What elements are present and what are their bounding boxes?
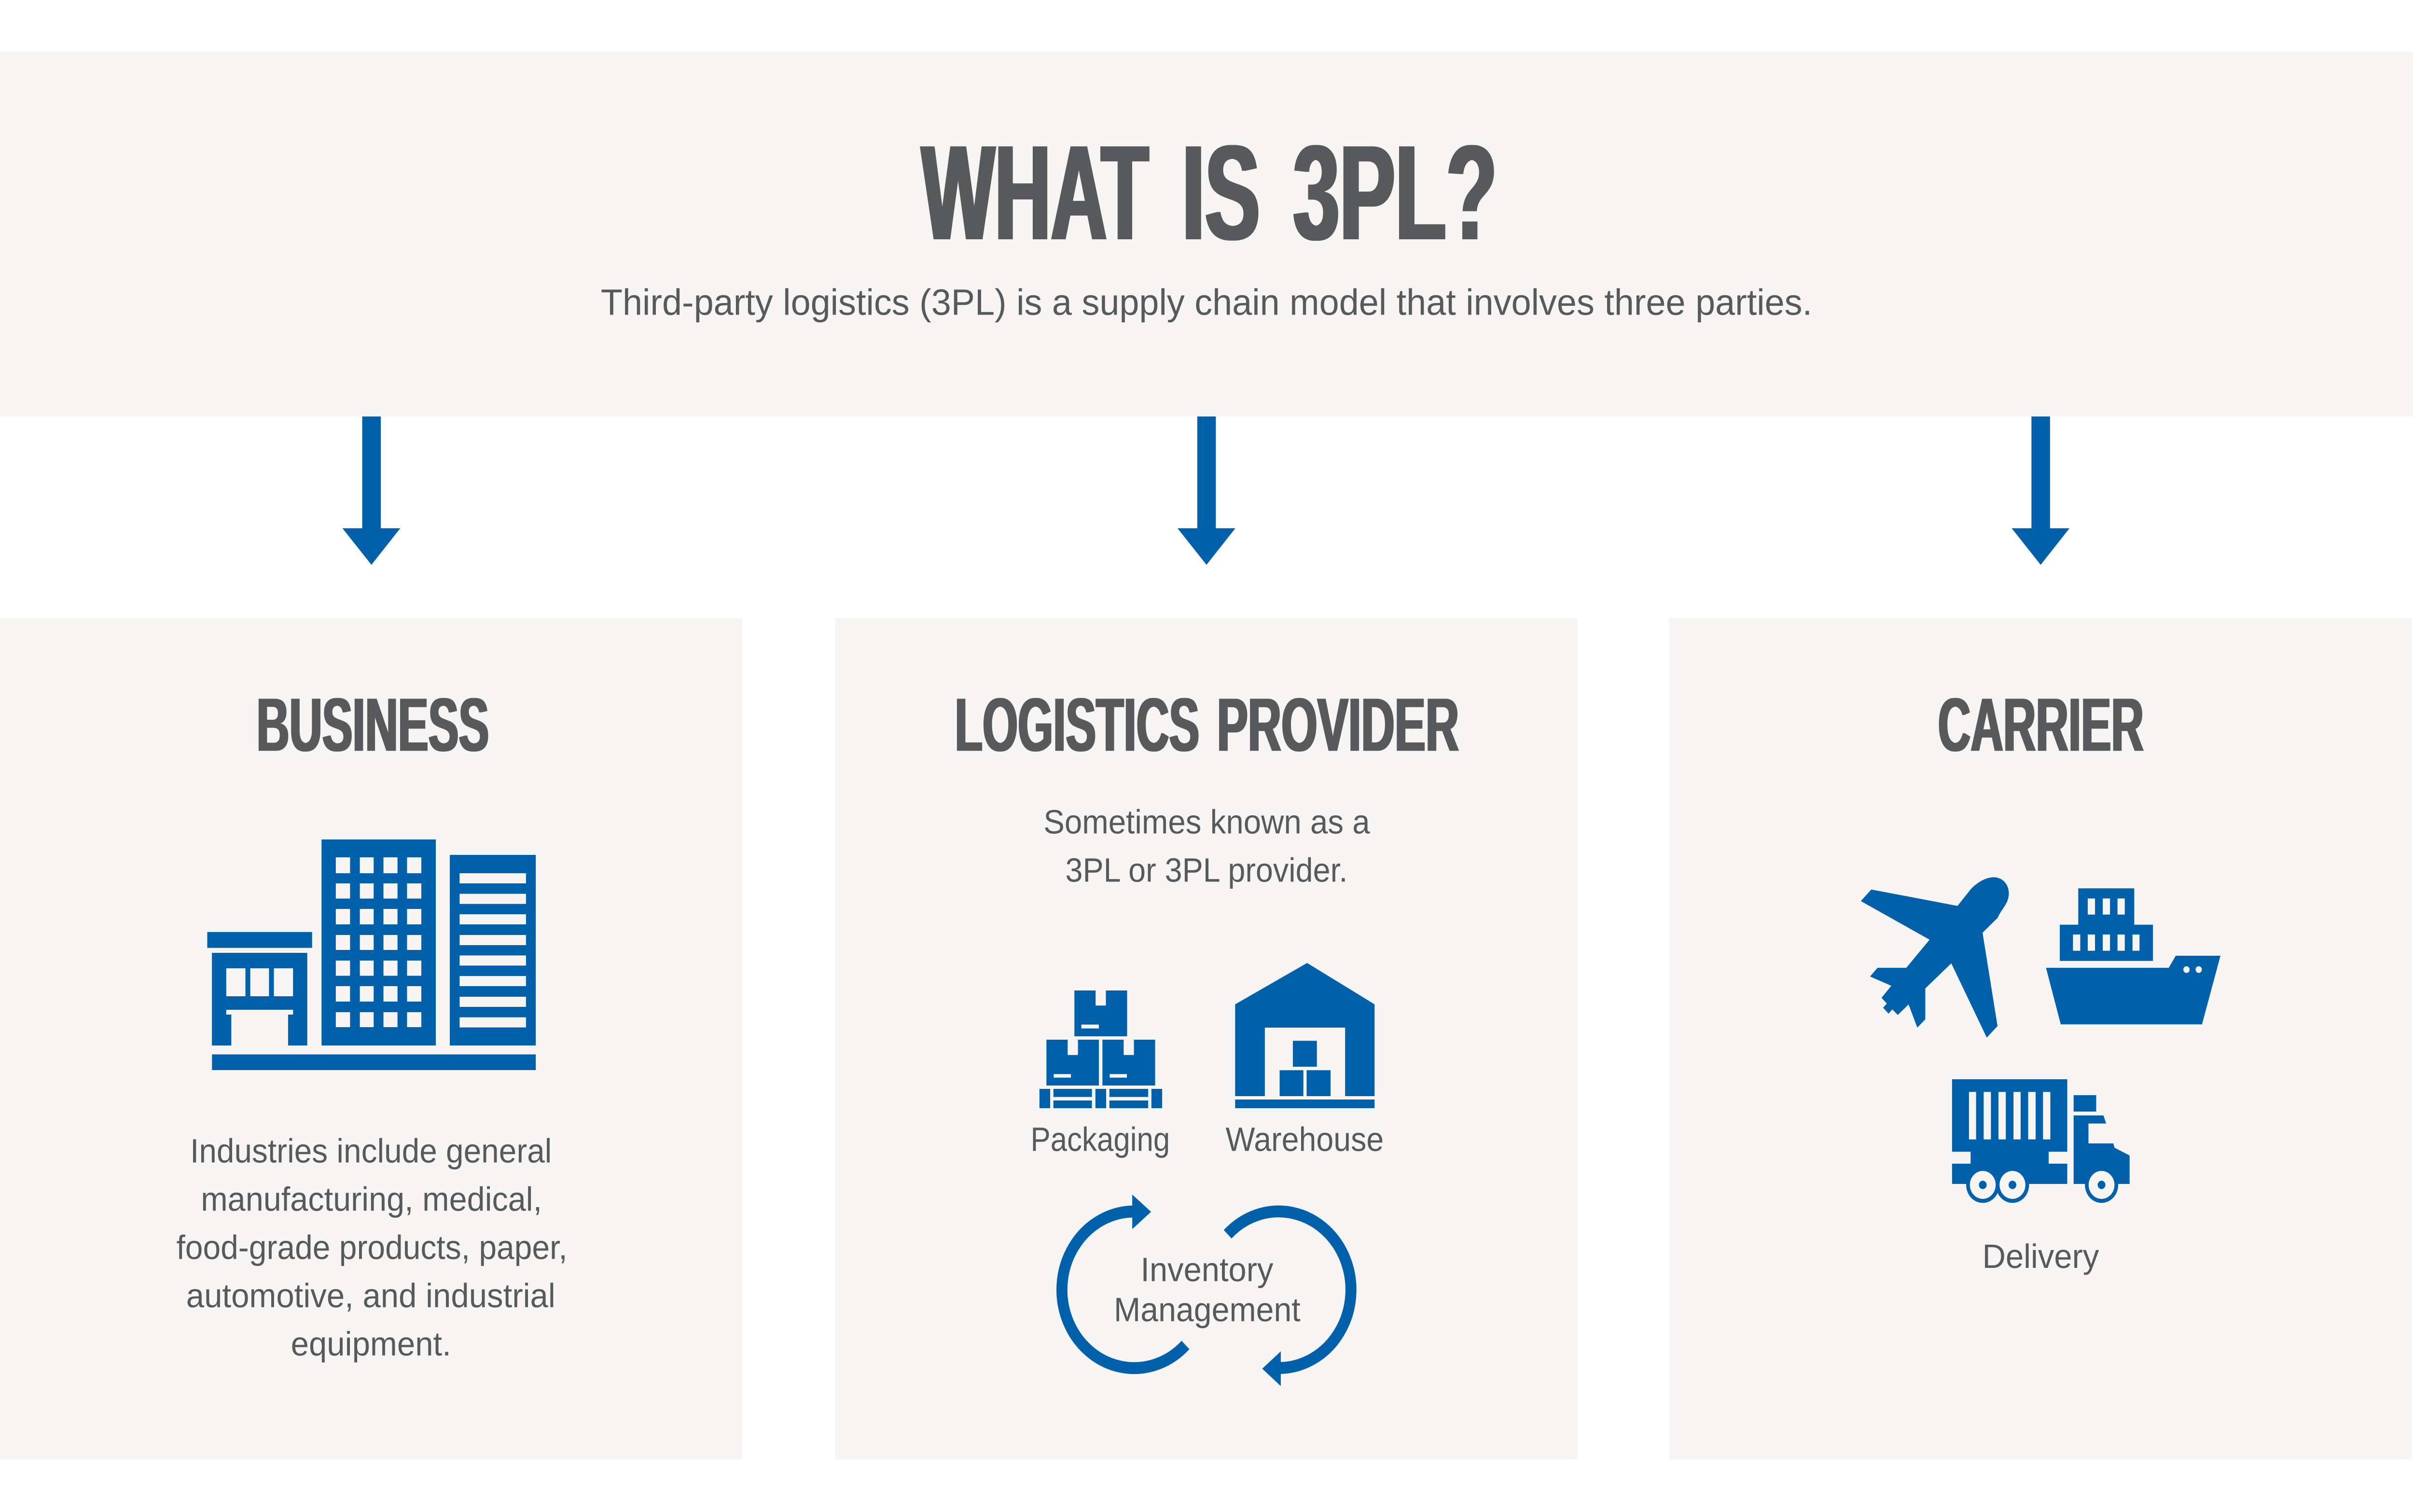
logistics heading: LOGISTICS xyxy=(955,683,1199,767)
subtitle: Third-party logistics (3PL) is a supply chain model that involves three parties. xyxy=(601,282,1812,323)
carrier panel background xyxy=(1669,618,2412,1459)
arrow: to carrier xyxy=(2012,416,2069,565)
business heading: BUSINESS xyxy=(257,683,489,767)
icon: packaging boxes xyxy=(1040,990,1162,1108)
title xyxy=(921,118,1497,268)
arrow: to logistics provider xyxy=(1178,416,1235,565)
business description: automotive, and industrial xyxy=(186,1277,555,1314)
title: IS xyxy=(1182,118,1260,268)
logistics description xyxy=(1043,803,1370,889)
panel: business xyxy=(0,618,742,1459)
inventory management label xyxy=(1114,1251,1301,1329)
business description: equipment. xyxy=(291,1325,451,1362)
panel: logistics provider xyxy=(835,618,1577,1459)
business description: Industries include general xyxy=(190,1132,552,1169)
icon: warehouse xyxy=(1235,963,1374,1108)
title: 3PL? xyxy=(1293,118,1497,268)
inventory management label: Inventory xyxy=(1140,1251,1273,1288)
icon: inventory cycle arrows xyxy=(1062,1195,1351,1386)
icon: cargo ship xyxy=(2046,888,2220,1024)
delivery label: Delivery xyxy=(1983,1237,2099,1275)
business description: manufacturing, medical, xyxy=(201,1180,542,1218)
packaging label: Packaging xyxy=(1030,1121,1170,1158)
inventory management label: Management xyxy=(1114,1291,1301,1329)
business description: food-grade products, paper, xyxy=(176,1228,568,1266)
warehouse label: Warehouse xyxy=(1226,1121,1384,1158)
business panel background xyxy=(0,618,742,1459)
business description xyxy=(176,1132,568,1362)
logistics heading: PROVIDER xyxy=(1217,683,1459,767)
panel: carrier xyxy=(1669,618,2412,1459)
carrier heading: CARRIER xyxy=(1938,683,2144,767)
icon: airplane xyxy=(1861,877,2009,1038)
title: WHAT xyxy=(921,118,1149,268)
logistics description: Sometimes known as a xyxy=(1043,803,1370,841)
header background xyxy=(0,52,2413,416)
icon: office buildings xyxy=(207,839,536,1070)
logistics panel background xyxy=(835,618,1577,1459)
icon: delivery truck xyxy=(1952,1079,2130,1203)
arrow: to business xyxy=(343,416,400,565)
logistics description: 3PL or 3PL provider. xyxy=(1065,852,1348,889)
header band xyxy=(0,52,2413,416)
